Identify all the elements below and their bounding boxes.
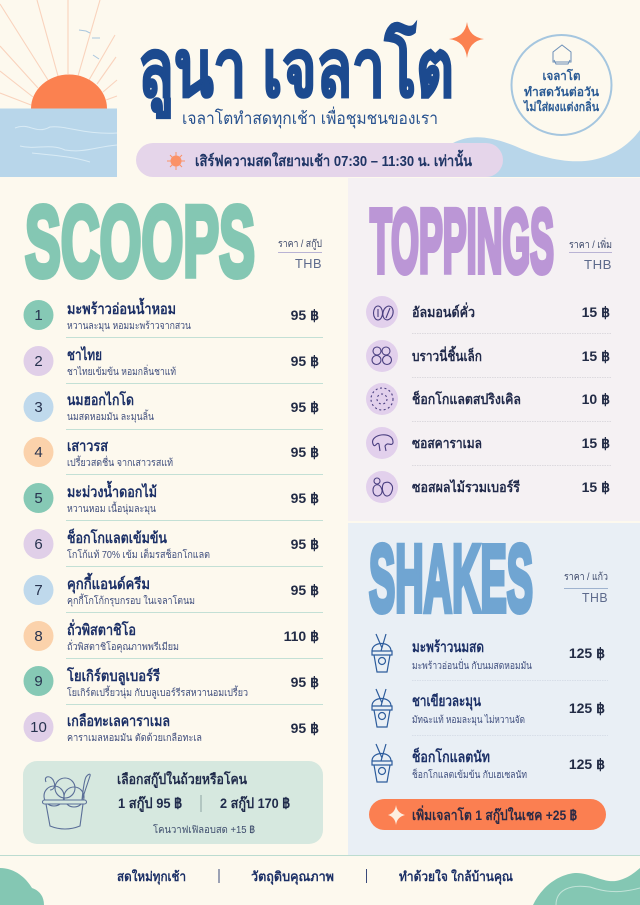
dividers [412,680,608,736]
icon: small sun [167,152,185,170]
price unit label [278,238,322,271]
panel: toppings background [348,178,640,521]
topping 4: caramel sauce [366,427,610,459]
item 1: มะพร้าวอ่อนน้ำหอม [67,297,176,318]
topping 3: chocolate sprinkles: ช็อกโกแลตสปริงเคิล [412,390,521,407]
topping 2: brownies [366,340,610,372]
pill text: เสิร์ฟความสดใสยามเช้า 07:30 – 11:30 น. เท่านั้น [195,149,473,170]
item 3 [24,390,319,423]
item 2 [24,345,319,378]
item 9 [24,666,319,699]
decoration: bottom right blob [533,868,640,905]
subtitle: เจลาโตทำสดทุกเช้า เพื่อชุมชนของเรา [182,106,438,129]
callout heading: เลือกสกู๊ปในถ้วยหรือโคน [117,770,247,788]
price unit label: THB [584,257,612,272]
one scoop price: 1 สกู๊ป 95 ฿ [118,795,182,812]
price unit label: THB [295,256,322,271]
item 9: 95 ฿ [291,674,319,690]
item 4: 4 [34,444,43,461]
pill: serving hours [136,143,503,177]
shake 2: matcha: ชาเขียวละมุน [412,693,482,711]
item 6: ช็อกโกแลตเข้มข้น [67,528,168,547]
item 1: 1 [34,307,43,324]
item 3: 3 [34,399,43,416]
item 4 [24,437,319,469]
item 3: 95 ฿ [291,399,319,415]
shake 1: coconut milk: มะพร้าวนมสด [412,639,484,656]
callout: cup or cone [23,761,323,844]
topping 4: caramel sauce: 15 ฿ [582,435,610,451]
topping 5: mixed berry sauce: 15 ฿ [582,479,610,495]
item 5: หวานหอม เนื้อนุ่มละมุน [67,501,156,515]
item 5 [24,480,319,515]
icon: orange star [449,22,484,58]
item 10: คาราเมลหอมมัน ตัดด้วยเกลือทะเล [67,732,202,744]
item 9: โยเกิร์ตเปรี้ยวนุ่ม กับบลูเบอร์รีรสหวานอมเปรี้ยว [67,685,248,699]
item 7: 7 [34,582,43,599]
item 7: คุกกี้แอนด์ครีม [67,572,150,594]
item 10: 95 ฿ [291,720,319,736]
panel: scoops [23,186,323,844]
item 7: 95 ฿ [291,582,319,598]
decoration: bottom left blob [0,868,44,905]
topping 1: almonds [366,296,610,328]
shake 3: chocolate hazelnut: ช็อกโกแลตนัท [412,747,490,766]
item 7 [24,572,319,607]
item 4: เสาวรส [67,438,109,455]
badge text: ไม่ใส่ผงแต่งกลิ่น [522,98,600,114]
footer text: quality ingredients: วัตถุดิบคุณภาพ [251,869,334,885]
header wave [453,130,640,177]
badge text [522,68,600,114]
panel: shakes [369,526,608,830]
icon: sparkle [388,805,405,825]
badge: made fresh daily [512,35,612,135]
panel: toppings [366,192,612,503]
item 5: มะม่วงน้ำดอกไม้ [67,480,157,501]
item 1: หวานละมุน หอมมะพร้าวจากสวน [67,320,191,332]
item 10: 10 [30,719,47,736]
topping 2: brownies: 15 ฿ [582,348,610,364]
waffle cone note: โคนวาฟเฟิลอบสด +15 ฿ [153,823,255,836]
item 3: นมสดหอมมัน ละมุนลิ้น [67,409,154,423]
topping 3: chocolate sprinkles [366,383,610,415]
topping 4: caramel sauce: ซอสคาราเมล [412,435,482,451]
shake 2: matcha [372,689,605,727]
item 6: โกโก้แท้ 70% เข้ม เต็มรสช็อกโกแลต [67,547,210,561]
dividers [66,338,323,704]
footer text: fresh every morning: สดใหม่ทุกเช้า [117,868,186,885]
badge text: ทำสดวันต่อวัน [524,85,600,99]
topping 2: brownies: บราวนี่ชิ้นเล็ก [412,345,482,364]
badge text: เจลาโต [542,68,581,83]
price separator [200,795,202,812]
shake 1: coconut milk: มะพร้าวอ่อนปั่น กับนมสดหอมมัน [412,658,532,672]
topping 5: mixed berry sauce: ซอสผลไม้รวมเบอร์รี [412,478,520,495]
item 8: ถั่วพิสตาชิโอ [67,619,136,639]
topping 1: almonds: 15 ฿ [582,304,610,320]
shake 3: chocolate hazelnut: 125 ฿ [569,756,605,772]
heading: scoops: SCOOPS [25,186,255,298]
price unit label [569,237,612,272]
item 10: เกลือทะเลคาราเมล [67,713,170,730]
item 8 [24,619,319,653]
shake 2: matcha: 125 ฿ [569,700,605,716]
item 2: 95 ฿ [291,353,319,369]
item 4: เปรี้ยวสดชื่น จากเสาวรสแท้ [67,455,173,469]
item 8: 8 [34,628,43,645]
item 5: 5 [34,490,43,507]
item 6 [24,528,319,561]
item 1 [24,297,319,332]
shake 3: chocolate hazelnut: ช็อกโกแลตเข้มข้น กับเฮเซลนัท [412,767,527,781]
title: ลูนา เจลาโต [138,21,454,119]
item 3: นมฮอกไกโด [67,390,134,409]
item 4: 95 ฿ [291,444,319,460]
topping 3: chocolate sprinkles: 10 ฿ [582,391,610,407]
price unit label: ราคา / เพิ่ม [569,237,612,251]
price unit label: ราคา / สกู๊ป [278,238,322,250]
item 9: 9 [34,673,43,690]
price unit label [564,571,608,605]
item 2: ชาไทย [67,345,102,364]
illustration: sunrise over sea [0,0,117,177]
item 9: โยเกิร์ตบลูเบอร์รี [66,666,161,686]
footer [0,856,640,905]
two scoop price: 2 สกู๊ป 170 ฿ [220,795,290,812]
price unit label: ราคา / แก้ว [564,571,608,583]
item 2: ชาไทยเข้มข้น หอมกลิ่นชาแท้ [67,364,176,378]
pill: add a scoop [369,799,606,830]
item 2: 2 [34,353,43,370]
topping 1: almonds: อัลมอนด์คั่ว [412,302,475,320]
topping 5: mixed berry sauce [366,471,610,503]
item 8: 110 ฿ [284,628,319,644]
pill text: เพิ่มเจลาโต 1 สกู๊ปในเชค +25 ฿ [412,805,577,824]
shake 1: coconut milk: 125 ฿ [569,645,605,661]
item 6: 95 ฿ [291,536,319,552]
item 8: ถั่วพิสตาชิโอคุณภาพพรีเมียม [67,639,179,653]
dividers [412,334,612,466]
footer text: made with heart: ทำด้วยใจ ใกล้บ้านคุณ [399,868,513,885]
shake 2: matcha: มัทฉะแท้ หอมละมุน ไม่หวานจัด [412,714,525,726]
item 7: คุกกี้โกโก้กรุบกรอบ ในเจลาโตนม [67,593,195,607]
panel: shakes background [348,523,640,855]
item 5: 95 ฿ [291,490,319,506]
price unit label: THB [582,590,608,605]
footer separator [219,869,366,883]
item 10 [24,712,319,744]
item 6: 6 [34,536,43,553]
icon: ice cream tub [42,774,90,829]
shake 1: coconut milk [372,634,605,672]
item 1: 95 ฿ [291,307,319,323]
shake 3: chocolate hazelnut [372,744,605,782]
icon: gelato cup [553,45,571,64]
